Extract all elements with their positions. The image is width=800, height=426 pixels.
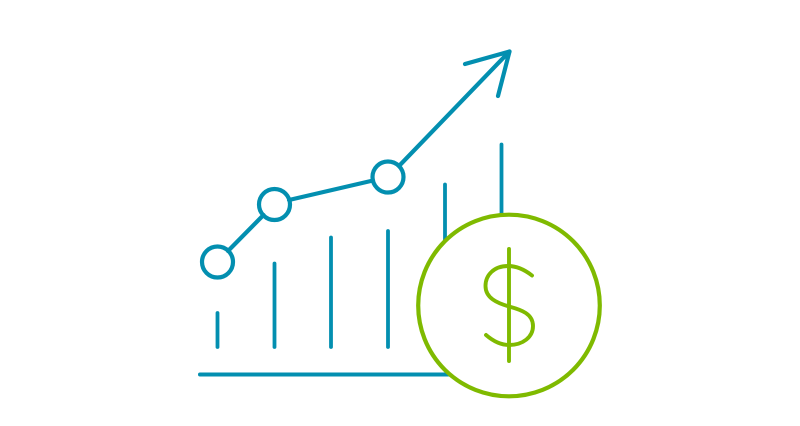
- arrow: upward trend: [399, 52, 510, 166]
- bar chart: vertical bars: [218, 144, 502, 347]
- chart baseline: [200, 372, 450, 376]
- data point 2: [259, 189, 290, 220]
- dollar sign: [486, 249, 533, 361]
- data point 1: [202, 246, 233, 278]
- trend line with data points: [202, 162, 404, 278]
- data point 3: [372, 162, 404, 192]
- icon: dollar coin: [418, 215, 600, 396]
